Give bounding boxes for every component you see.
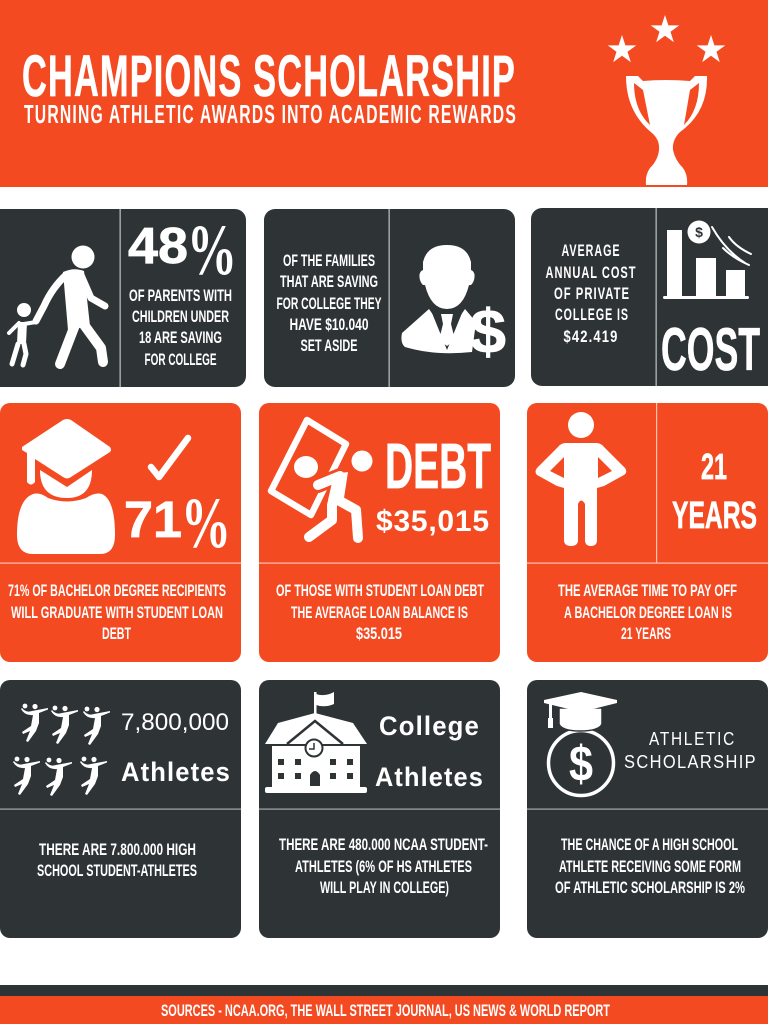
label: athletic scholarship: ATHLETIC [649, 729, 736, 749]
text: debt description: OF THOSE WITH STUDENT LOAN DEBT [276, 581, 484, 600]
label: Athletes: Athletes [121, 757, 231, 787]
footer bar orange [0, 996, 768, 1024]
panel: college athletes [259, 680, 500, 938]
icon: school building [265, 692, 367, 793]
text: annual cost: AVERAGE [562, 241, 620, 260]
text: annual cost: OF PRIVATE [554, 284, 630, 303]
text: parents saving: OF PARENTS WITH [129, 286, 232, 305]
label: athletic scholarship: SCHOLARSHIP [624, 752, 757, 772]
panel: high school athletes [0, 680, 241, 938]
icon: athlete figures [13, 704, 110, 796]
header band [0, 0, 768, 187]
text: high school athletes [37, 840, 197, 880]
text: family savings: OF THE FAMILIES [283, 251, 375, 270]
icon: check mark [151, 438, 188, 477]
footer bar dark [0, 985, 768, 996]
panel: parents saving [0, 209, 246, 387]
stat: 71%: 71 [124, 491, 182, 548]
panel: athletic scholarship [527, 680, 768, 938]
text: college athletes [279, 835, 488, 897]
icon: falling cost chart: $ [695, 224, 703, 240]
icon: person carrying money [271, 420, 372, 538]
text: scholarship chance [555, 835, 745, 897]
text: family savings: THAT ARE SAVING [280, 272, 378, 291]
text: parents saving [129, 286, 232, 369]
text: annual cost: $42.419 [564, 327, 618, 346]
text: payoff description: 21 YEARS [621, 624, 671, 643]
panel: family savings [264, 209, 515, 387]
label: athletic scholarship [624, 729, 757, 772]
text: college athletes: THERE ARE 480.000 NCAA STUDENT- [279, 835, 488, 854]
text: payoff description [558, 581, 737, 643]
heading: DEBT: DEBT [385, 430, 491, 502]
icon: standing person [536, 412, 626, 546]
text: 71% description [8, 581, 226, 643]
text: college athletes: ATHLETES (6% OF HS ATHLETES [295, 857, 472, 876]
text: parents saving: 18 ARE SAVING [139, 328, 222, 347]
stat: 48%: 48 [128, 217, 188, 274]
text: parents saving: CHILDREN UNDER [132, 307, 229, 326]
text: debt description: THE AVERAGE LOAN BALANCE IS [291, 603, 468, 622]
text: family savings: HAVE $10.040 [290, 315, 368, 334]
stat: 21: 21 [701, 446, 727, 487]
text: 71% description: 71% OF BACHELOR DEGREE RECIPIENTS [8, 581, 226, 600]
text: family savings [276, 251, 382, 355]
text: college athletes: WILL PLAY IN COLLEGE) [320, 878, 449, 897]
panel: 71% graduate with debt [0, 403, 241, 662]
icon: graduation cap and coin [544, 692, 617, 796]
text: annual cost: COLLEGE IS [555, 305, 629, 324]
icon: businessman with dollar [401, 245, 506, 367]
icon: falling cost chart [663, 218, 751, 299]
text: debt description: $35.015 [356, 624, 402, 643]
stat: 7,800,000: 7,800,000 [121, 709, 229, 736]
label: College: College [379, 711, 480, 741]
panel: debt balance [259, 403, 500, 662]
text: 71% description: DEBT [102, 624, 131, 643]
icon: graduate [17, 419, 115, 554]
text: high school athletes: THERE ARE 7.800.000 HIGH [39, 840, 196, 859]
icon: three stars [608, 15, 725, 62]
label: Athletes: Athletes [375, 762, 484, 792]
text: parents saving: FOR COLLEGE [144, 350, 216, 369]
text: annual cost: ANNUAL COST [546, 263, 636, 282]
stat: $35,015: $35,015 [376, 505, 489, 538]
panel: annual cost [531, 208, 768, 386]
icon: trophy [626, 76, 707, 185]
text: family savings: SET ASIDE [300, 336, 358, 355]
text: debt description [276, 581, 484, 643]
text: high school athletes: SCHOOL STUDENT-ATHLETES [37, 861, 197, 880]
icon: businessman with dollar: $ [470, 298, 506, 367]
text: annual cost [546, 241, 636, 346]
panel: 21 years [527, 403, 768, 662]
icon: graduation cap and coin: $ [569, 736, 593, 792]
text: family savings: FOR COLLEGE THEY [276, 294, 382, 313]
panel: 71% graduate with debt: % [181, 483, 231, 563]
icon: parent and child [9, 246, 105, 365]
panel: parents saving: % [187, 210, 237, 290]
text: 71% description: WILL GRADUATE WITH STUDENT LOAN [11, 603, 223, 622]
